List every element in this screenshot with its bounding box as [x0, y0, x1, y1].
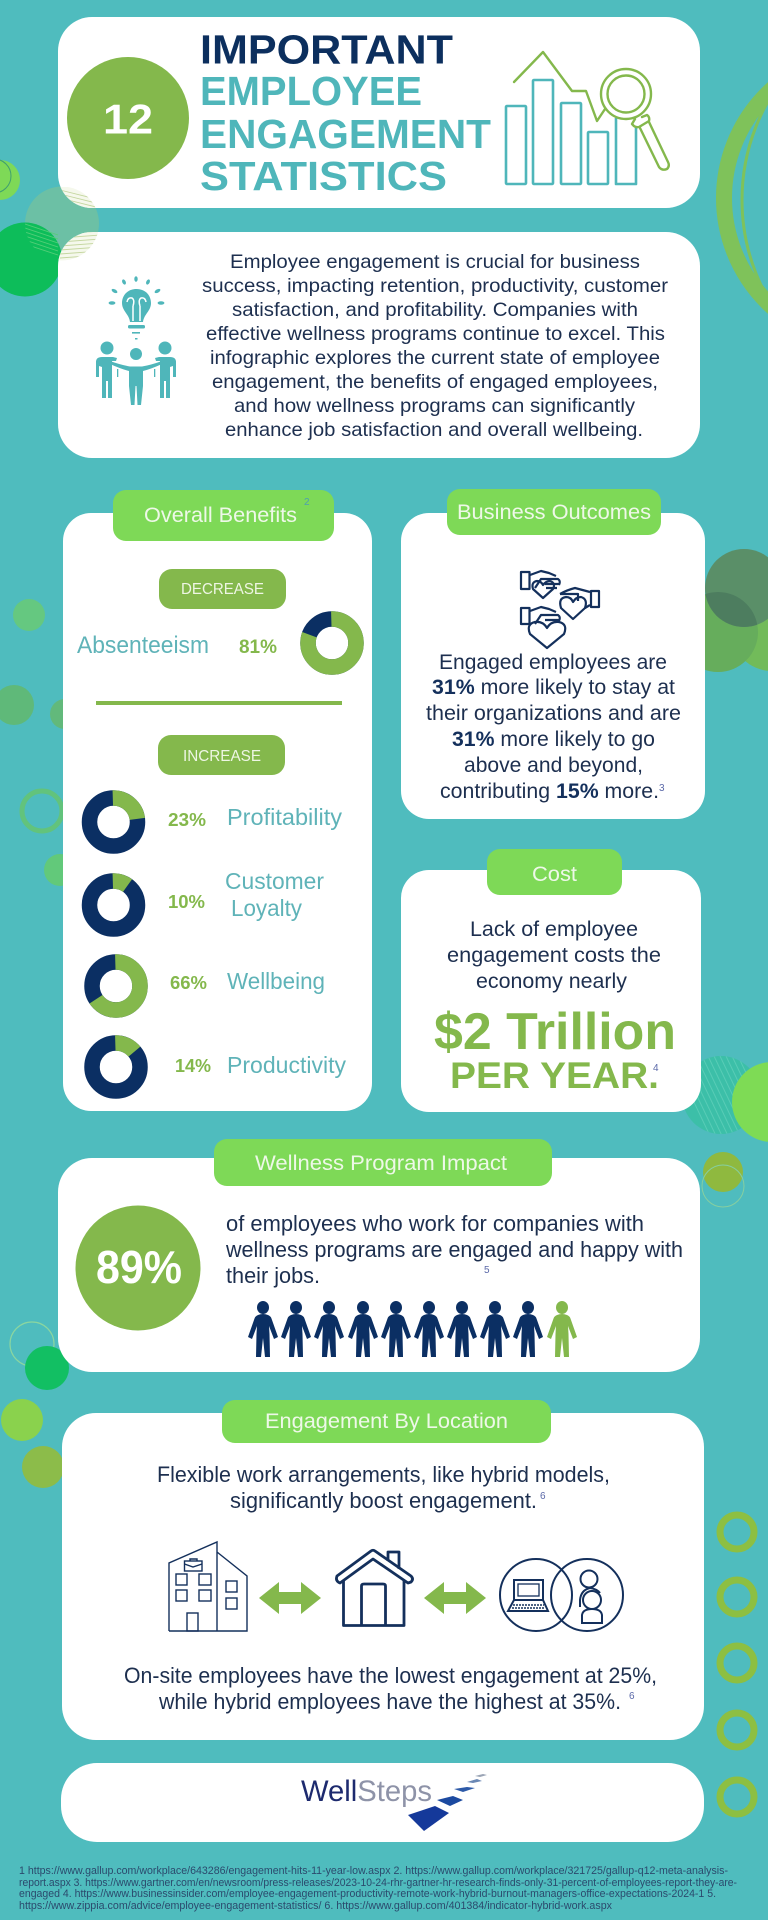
icon: hybrid work venn with laptop and person — [500, 1559, 623, 1631]
icon: house — [336, 1550, 412, 1626]
stat: absenteeism — [77, 619, 356, 667]
text: on-site versus hybrid: On-site employees have the lowest engagement at 25%, — [124, 1663, 657, 1688]
text: introduction paragraph: success, impacting retention, productivity, customer — [202, 275, 669, 297]
tab: wellness program impact — [214, 1139, 552, 1186]
text: wellness description: their jobs. — [226, 1263, 320, 1288]
panel: overall benefits — [63, 490, 372, 1111]
text: introduction paragraph: engagement, the benefits of engaged employees, — [212, 371, 658, 393]
pill: increase: INCREASE — [183, 748, 261, 765]
badge: 12: 12 — [103, 96, 153, 142]
stat: two trillion per year: 4 — [653, 1063, 659, 1074]
stat: productivity: 14% — [175, 1055, 211, 1076]
text: introduction paragraph: infographic explores the current state of employee — [210, 347, 660, 369]
logo: WellSteps — [301, 1774, 487, 1831]
stat: productivity — [92, 1043, 347, 1091]
panel: business outcomes — [401, 489, 705, 819]
text: on-site versus hybrid: 6 — [629, 1691, 635, 1702]
text: flexible work: Flexible work arrangements, like hybrid models, — [157, 1462, 610, 1487]
heading: title text: ENGAGEMENT — [200, 111, 491, 157]
stat: wellbeing: Wellbeing — [227, 968, 325, 994]
panel: title — [58, 17, 700, 208]
badge: 12 — [67, 57, 189, 179]
text: cost description: economy nearly — [476, 970, 627, 993]
text: business outcomes: 31% more likely to stay at — [432, 676, 675, 699]
text: cost description: engagement costs the — [447, 944, 661, 967]
stat: customer loyalty: 10% — [168, 891, 205, 912]
text: wellness description — [225, 1211, 683, 1288]
badge: 89%: 89% — [96, 1241, 182, 1293]
panel: wellness program impact — [58, 1139, 700, 1372]
stat: profitability: 23% — [168, 809, 206, 830]
text: footnotes — [19, 1865, 737, 1912]
text: cost description — [447, 918, 661, 993]
text: business outcomes: 31% more likely to go — [452, 728, 655, 751]
stat: profitability: Profitability — [227, 804, 343, 830]
icon: bar chart with magnifier — [506, 52, 669, 184]
pill: increase — [158, 735, 285, 775]
pill: decrease: DECREASE — [181, 581, 264, 598]
tab: business outcomes — [447, 489, 661, 535]
panel: engagement by location — [62, 1400, 704, 1740]
text: wellness description: 5 — [484, 1265, 490, 1276]
logo: WellSteps: WellSteps — [301, 1775, 432, 1808]
text: introduction paragraph: enhance job satisfaction and overall wellbeing. — [225, 419, 643, 441]
tab: overall benefits — [113, 490, 334, 541]
text: introduction paragraph: and how wellness programs can significantly — [234, 395, 635, 417]
tab: overall benefits: Overall Benefits — [144, 504, 297, 527]
text: on-site versus hybrid: while hybrid employees have the highest at 35%. — [158, 1689, 621, 1714]
text: cost description: Lack of employee — [470, 918, 638, 941]
stat: wellbeing — [92, 962, 325, 1010]
tab: engagement by location — [222, 1400, 551, 1443]
stat: two trillion per year: $2 Trillion — [434, 1003, 676, 1061]
icon: ten people, nine highlighted — [248, 1301, 577, 1357]
text: introduction paragraph: Employee engagement is crucial for business — [230, 251, 640, 273]
panel: cost — [401, 849, 701, 1112]
text: flexible work: 6 — [540, 1491, 546, 1502]
stat: two trillion per year: PER YEAR. — [450, 1055, 659, 1096]
text: footnotes: report.aspx 3. https://www.gartner.com/en/newsroom/press-releases/2023-10-24-rhr-gartner-hr-research-finds-only-31-percent-of-employees-report-they-are- — [19, 1877, 737, 1889]
tab: engagement by location: Engagement By Location — [265, 1410, 508, 1433]
panel: logo — [61, 1763, 704, 1842]
stat: profitability — [90, 798, 343, 846]
divider — [96, 701, 342, 705]
panel: introduction — [58, 232, 700, 458]
donut: 81% — [308, 619, 356, 667]
decorative hatch over cards — [25, 187, 100, 262]
text: business outcomes: contributing 15% more. — [440, 780, 659, 803]
heading: title text: STATISTICS — [200, 153, 447, 199]
icon: office building — [169, 1542, 247, 1631]
stat: wellbeing: 66% — [170, 972, 207, 993]
pill: decrease — [159, 569, 286, 609]
heading: title text — [200, 26, 491, 199]
stat: customer loyalty: Customer — [225, 868, 324, 894]
icon: light bulb and people — [96, 276, 176, 405]
heading: title text: IMPORTANT — [200, 26, 453, 72]
text: introduction paragraph — [202, 251, 669, 441]
text: footnotes: https://www.zippia.com/advice/employee-engagement-statistics/ 6. https://www.gallup.com/401384/indicator-hybrid-work.aspx — [19, 1900, 612, 1912]
stat: two trillion per year — [434, 1003, 676, 1096]
arrow: double-headed — [424, 1582, 486, 1614]
heading: title text: EMPLOYEE — [200, 68, 422, 114]
stat: productivity: Productivity — [227, 1052, 347, 1078]
tab: cost: Cost — [532, 863, 577, 886]
stat: customer loyalty — [90, 868, 324, 929]
text: business outcomes — [426, 651, 681, 803]
text: wellness description: of employees who work for companies with — [226, 1211, 644, 1236]
stat: absenteeism: 81% — [239, 637, 277, 658]
tab: overall benefits: 2 — [304, 497, 310, 508]
text: introduction paragraph: effective wellness programs continue to excel. This — [206, 323, 665, 345]
stat: absenteeism: Absenteeism — [77, 632, 209, 659]
text: flexible work: significantly boost engagement. — [230, 1488, 537, 1513]
text: on-site versus hybrid — [124, 1663, 657, 1714]
text: introduction paragraph: satisfaction, and profitability. Companies with — [232, 299, 638, 321]
text: business outcomes: above and beyond, — [464, 754, 643, 777]
arrow: double-headed — [259, 1582, 321, 1614]
stat: customer loyalty: Loyalty — [231, 895, 302, 921]
text: flexible work — [157, 1462, 610, 1513]
tab: wellness program impact: Wellness Program Impact — [255, 1152, 507, 1175]
text: business outcomes: 3 — [659, 783, 665, 794]
tab: cost — [487, 849, 622, 895]
text: wellness description: wellness programs are engaged and happy with — [225, 1237, 683, 1262]
text: footnotes: engaged 4. https://www.businessinsider.com/employee-engagement-productivity-remote-work-hybrid-burnout-managers-office-expectations-2024-1 5. — [19, 1888, 716, 1900]
text: footnotes: 1 https://www.gallup.com/workplace/643286/engagement-hits-11-year-low.aspx 2. https://www.gallup.com/workplace/321725/gallup-q12-meta-analysis- — [19, 1865, 728, 1877]
text: business outcomes: Engaged employees are — [439, 651, 667, 674]
badge: 89% — [76, 1206, 200, 1330]
icon: hands holding hearts — [521, 571, 599, 648]
text: business outcomes: their organizations and are — [426, 702, 681, 725]
tab: business outcomes: Business Outcomes — [457, 501, 651, 524]
